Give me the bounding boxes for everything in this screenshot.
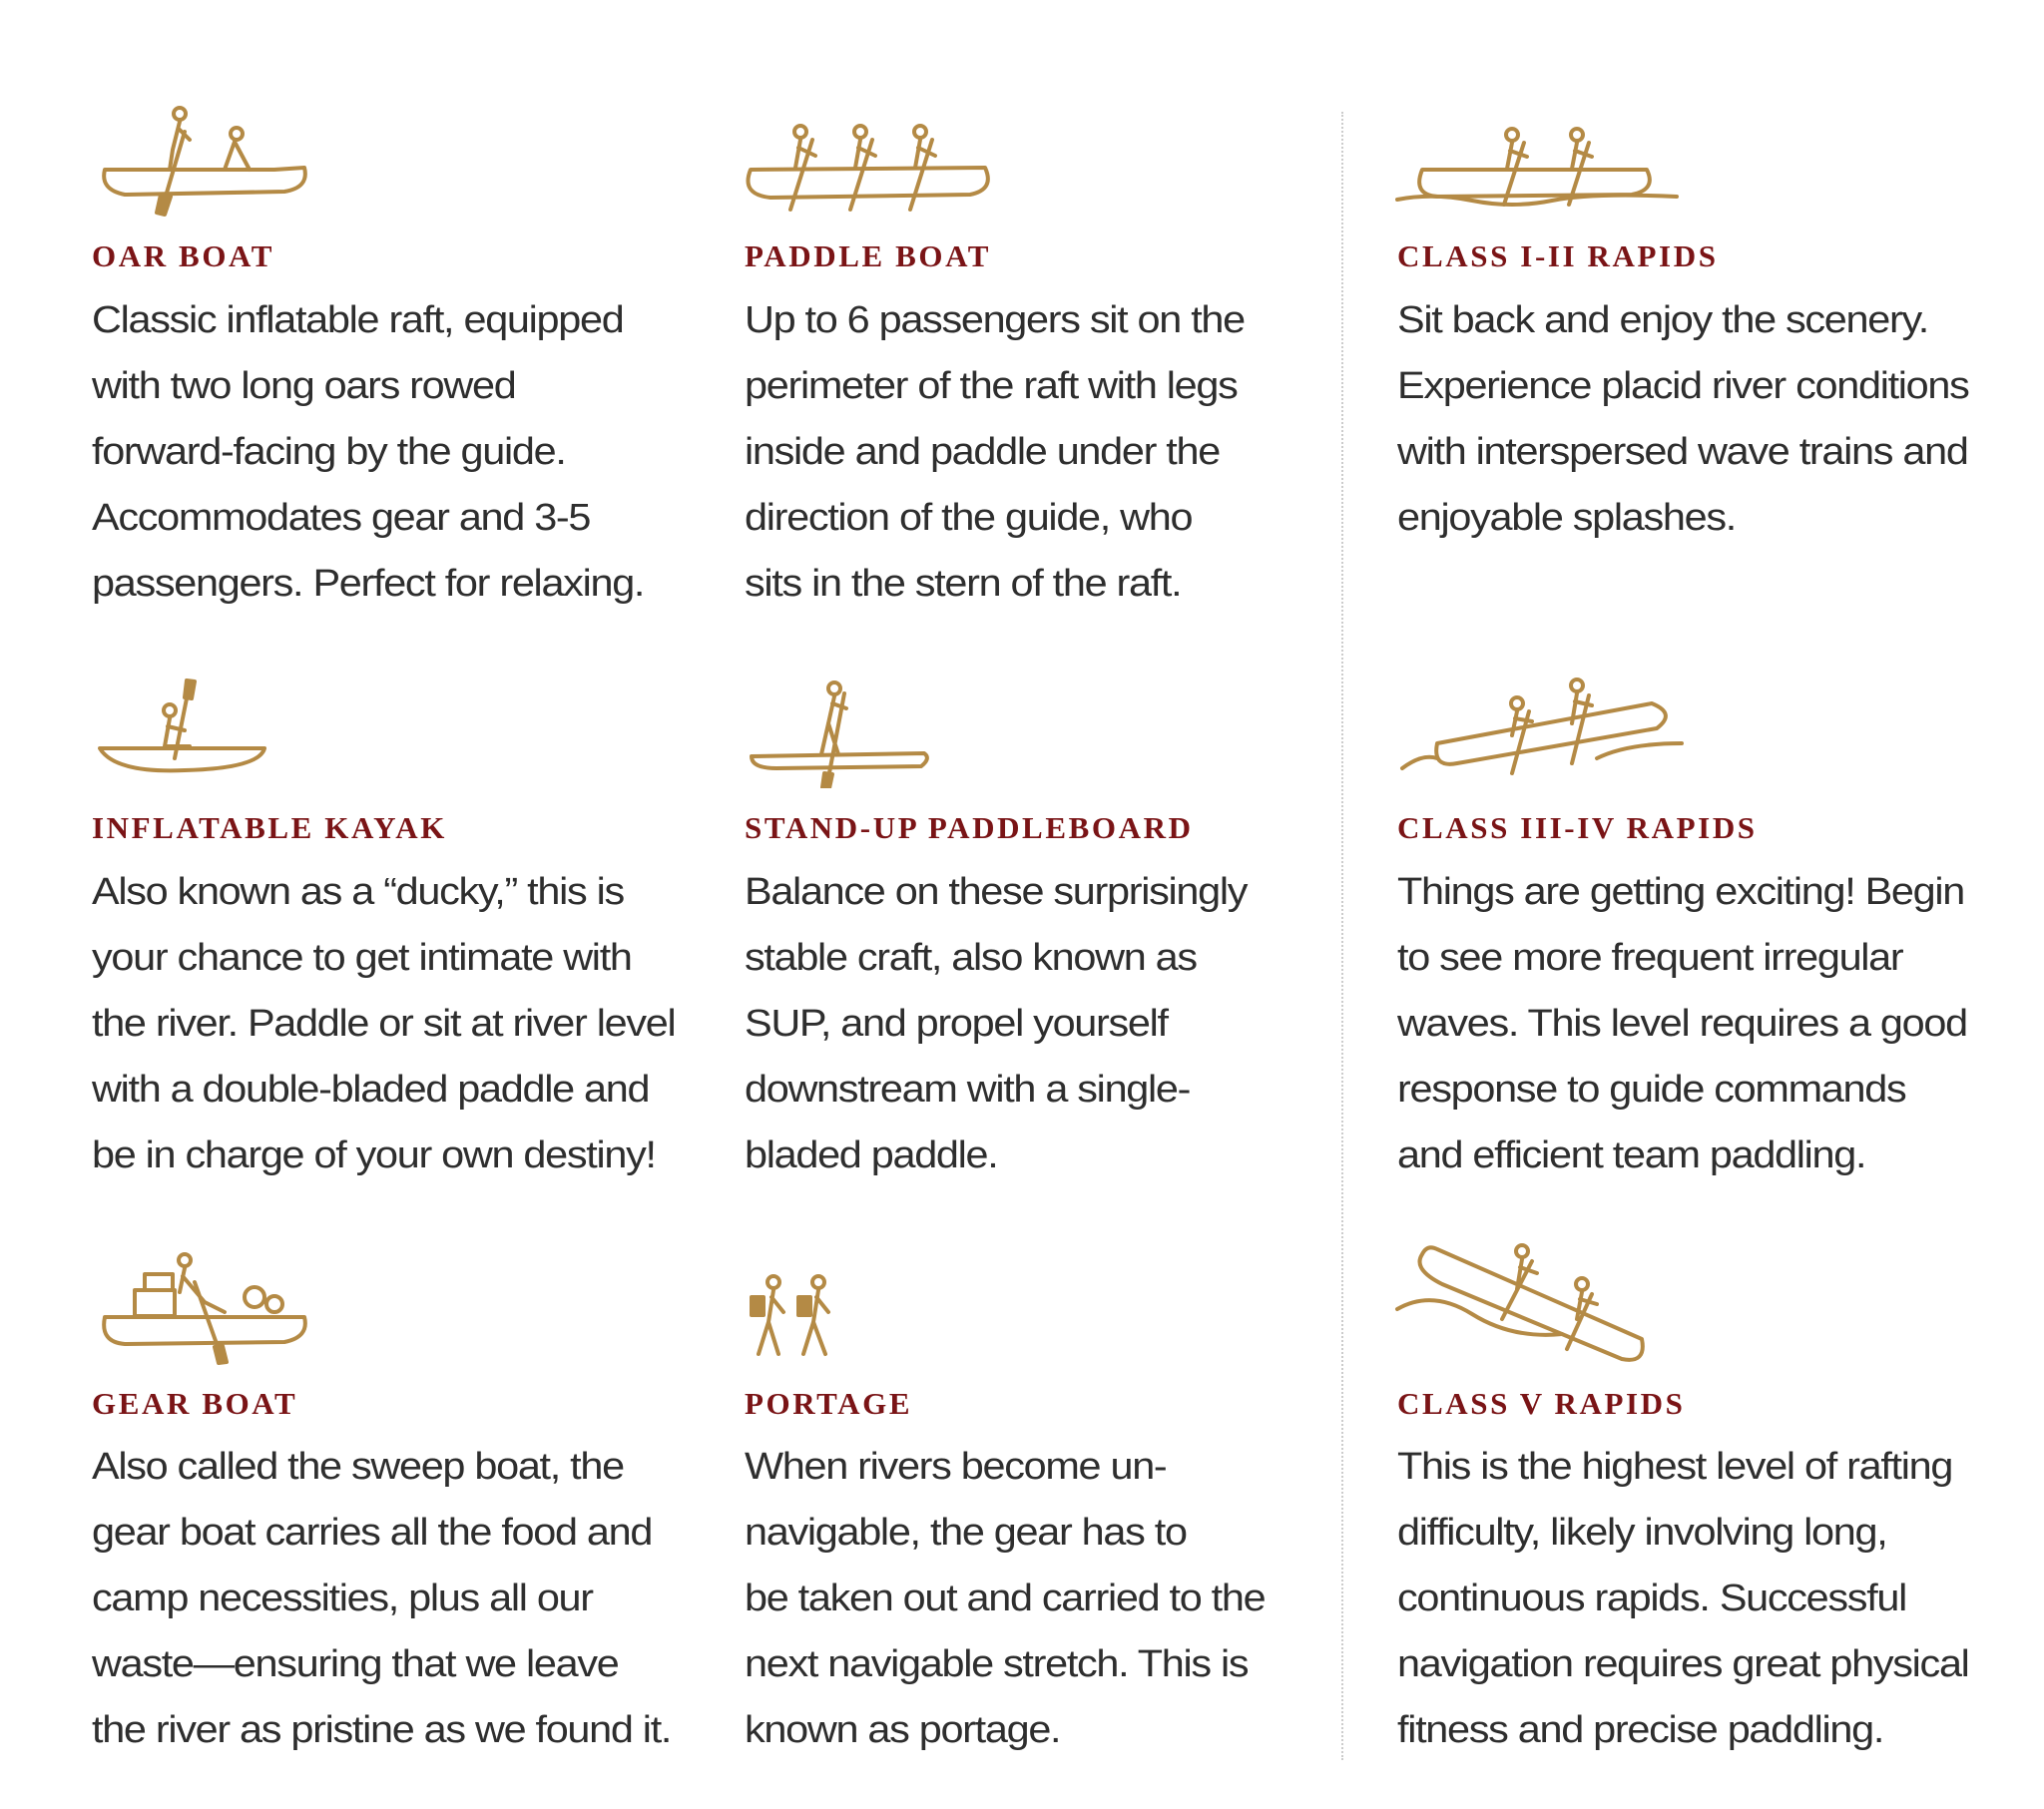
text: class V: fitness and precise paddling. bbox=[1397, 1709, 1883, 1751]
text: paddle boat: perimeter of the raft with legs bbox=[745, 365, 1238, 407]
text: inflatable kayak: your chance to get intimate with bbox=[92, 937, 632, 979]
heading: stand-up paddleboard: STAND-UP PADDLEBOARD bbox=[745, 810, 1194, 845]
icon: class I-II rapids bbox=[1395, 127, 1679, 207]
text: oar boat: with two long oars rowed bbox=[92, 365, 515, 407]
heading: portage: PORTAGE bbox=[745, 1386, 912, 1421]
icon: class V rapids bbox=[1395, 1243, 1645, 1362]
text: paddle boat: inside and paddle under the bbox=[745, 431, 1220, 473]
text: class V: This is the highest level of rafting bbox=[1397, 1446, 1952, 1488]
icon: oar boat bbox=[102, 106, 307, 217]
text: class V: navigation requires great physical bbox=[1397, 1643, 1969, 1685]
text: class III-IV bbox=[1397, 871, 1967, 1176]
text: portage bbox=[745, 1446, 1265, 1751]
text: inflatable kayak bbox=[92, 871, 675, 1176]
icon: portage bbox=[750, 1274, 830, 1357]
text: portage: navigable, the gear has to bbox=[745, 1512, 1187, 1554]
text: inflatable kayak: the river. Paddle or sit at river level bbox=[92, 1003, 675, 1045]
text: class III-IV: waves. This level requires a good bbox=[1397, 1003, 1967, 1045]
text: gear boat: Also called the sweep boat, the bbox=[92, 1446, 624, 1488]
text: gear boat: camp necessities, plus all our bbox=[92, 1578, 593, 1619]
icon: class III-IV rapids bbox=[1399, 678, 1684, 775]
text: class V: difficulty, likely involving long, bbox=[1397, 1512, 1886, 1554]
text: class I-II: enjoyable splashes. bbox=[1397, 497, 1736, 539]
text: oar boat: passengers. Perfect for relaxing. bbox=[92, 563, 644, 605]
text: portage: When rivers become un- bbox=[745, 1446, 1166, 1488]
text: paddle boat: direction of the guide, who bbox=[745, 497, 1192, 539]
text: class III-IV: Things are getting exciting! Begin bbox=[1397, 871, 1964, 913]
text: oar boat: Accommodates gear and 3-5 bbox=[92, 497, 590, 539]
text: stand-up paddleboard bbox=[745, 871, 1248, 1176]
text: inflatable kayak: be in charge of your own destiny! bbox=[92, 1134, 656, 1176]
text: stand-up paddleboard: stable craft, also known as bbox=[745, 937, 1197, 979]
icon: inflatable kayak bbox=[98, 678, 266, 772]
text: gear boat: gear boat carries all the food and bbox=[92, 1512, 652, 1554]
text: oar boat: forward-facing by the guide. bbox=[92, 431, 566, 473]
icon: stand-up paddleboard bbox=[750, 680, 929, 788]
text: inflatable kayak: with a double-bladed paddle and bbox=[92, 1069, 649, 1111]
text: stand-up paddleboard: bladed paddle. bbox=[745, 1134, 997, 1176]
text: class III-IV: and efficient team paddling. bbox=[1397, 1134, 1865, 1176]
text: gear boat bbox=[92, 1446, 671, 1751]
text: stand-up paddleboard: Balance on these surprisingly bbox=[745, 871, 1247, 913]
text: oar boat: Classic inflatable raft, equipped bbox=[92, 299, 623, 341]
text: class I-II: with interspersed wave trains and bbox=[1397, 431, 1968, 473]
heading: oar boat: OAR BOAT bbox=[92, 238, 274, 273]
text: class V bbox=[1397, 1446, 1969, 1751]
text: stand-up paddleboard: SUP, and propel yourself bbox=[745, 1003, 1168, 1045]
text: inflatable kayak: Also known as a “ducky,” this is bbox=[92, 871, 624, 913]
text: portage: next navigable stretch. This is bbox=[745, 1643, 1248, 1685]
text: portage: be taken out and carried to the bbox=[745, 1578, 1265, 1619]
text: paddle boat bbox=[745, 299, 1245, 605]
text: class I-II: Experience placid river conditions bbox=[1397, 365, 1969, 407]
icon: gear boat bbox=[102, 1252, 307, 1365]
text: portage: known as portage. bbox=[745, 1709, 1060, 1751]
heading: gear boat: GEAR BOAT bbox=[92, 1386, 297, 1421]
text: class I-II bbox=[1397, 299, 1969, 539]
heading: class III-IV: CLASS III-IV RAPIDS bbox=[1397, 810, 1758, 845]
text: class III-IV: to see more frequent irregular bbox=[1397, 937, 1902, 979]
text: class III-IV: response to guide commands bbox=[1397, 1069, 1905, 1111]
text: gear boat: waste—ensuring that we leave bbox=[92, 1643, 618, 1685]
text: paddle boat: sits in the stern of the raft. bbox=[745, 563, 1181, 605]
icon: paddle boat bbox=[747, 124, 990, 212]
heading: paddle boat: PADDLE BOAT bbox=[745, 238, 991, 273]
text: class V: continuous rapids. Successful bbox=[1397, 1578, 1906, 1619]
text: paddle boat: Up to 6 passengers sit on the bbox=[745, 299, 1245, 341]
text: oar boat bbox=[92, 299, 644, 605]
heading: class I-II: CLASS I-II RAPIDS bbox=[1397, 238, 1719, 273]
text: class I-II: Sit back and enjoy the scenery. bbox=[1397, 299, 1928, 341]
heading: class V: CLASS V RAPIDS bbox=[1397, 1386, 1686, 1421]
text: stand-up paddleboard: downstream with a single- bbox=[745, 1069, 1190, 1111]
heading: inflatable kayak: INFLATABLE KAYAK bbox=[92, 810, 447, 845]
text: gear boat: the river as pristine as we found it. bbox=[92, 1709, 671, 1751]
